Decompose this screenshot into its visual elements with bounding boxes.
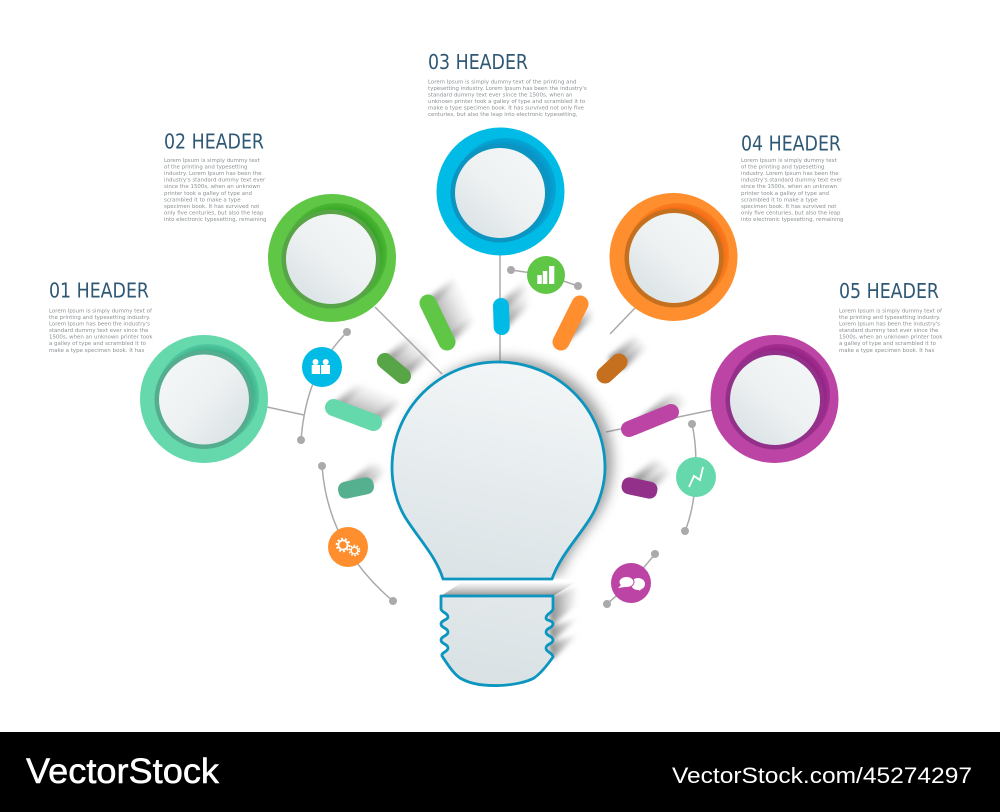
pill: dark orange — [605, 337, 647, 375]
panel: 04 header text: industry. Lorem Ipsum has been the — [741, 171, 839, 177]
panel: 03 header text: Lorem Ipsum is simply dummy text of the printing and — [428, 80, 576, 86]
pill: green — [428, 279, 475, 342]
image url: VectorStock.com/45274297 — [672, 763, 972, 788]
icon: bar chart — [507, 256, 582, 294]
pill: orange — [561, 280, 608, 342]
panel: 02 header text: of the printing and typesetting — [164, 165, 248, 171]
panel: 01 header text: make a type specimen book. It has — [49, 348, 144, 354]
panel: 05 header text: 1500s, when an unknown printer took — [839, 335, 943, 341]
panel: 05 header text: the printing and typesetting industry. — [839, 315, 941, 321]
panel: 04 header text: 04 HEADER — [741, 132, 841, 156]
panel: 03 header text: 03 HEADER — [428, 50, 528, 74]
panel: 02 header text: industry. Lorem Ipsum has been the — [164, 171, 262, 177]
panel: 01 header text: the printing and typesetting industry. — [49, 315, 151, 321]
circle 02 — [268, 194, 396, 322]
panel: 04 header text: since the 1500s, when an unknown — [741, 184, 837, 190]
panel: 02 header text: industry's standard dummy text ever — [164, 178, 266, 184]
panel: 01 header text: Lorem Ipsum has been the industry's — [49, 322, 150, 328]
circle 03 — [436, 128, 564, 256]
pill: dark green — [385, 337, 431, 376]
panel: 03 header text: make a type specimen book. It has survived not only five — [428, 106, 585, 112]
circle 05 — [710, 335, 838, 463]
panel: 02 header text: into electronic typesetting, remaining — [164, 217, 266, 223]
circle 04 — [610, 193, 738, 321]
icon: gears — [318, 462, 397, 605]
panel: 05 header text: Lorem Ipsum is simply dummy text of — [839, 308, 943, 314]
panel: 01 header text: standard dummy text ever since the — [49, 328, 149, 334]
panel: 02 header text: since the 1500s, when an unknown — [164, 184, 260, 190]
connector lines — [267, 255, 712, 432]
panel: 04 header text: scrambled it to make a type — [741, 197, 818, 203]
pill: purple — [620, 462, 675, 500]
panel: 01 header text: 1500s, when an unknown printer took — [49, 335, 153, 341]
panel: 04 header text: of the printing and typesetting — [741, 165, 824, 171]
panel: 01 header text — [49, 278, 153, 354]
pill: dark mint — [337, 463, 392, 500]
panel: 05 header text: 05 HEADER — [839, 279, 939, 303]
panel: 04 header text: industry's standard dummy text ever — [741, 178, 843, 184]
icon: people — [297, 328, 351, 444]
panel: 02 header text — [164, 130, 266, 223]
panel: 05 header text: Lorem Ipsum has been the industry's — [839, 322, 940, 328]
panel: 03 header text: centuries, but also the leap into electronic typesetting, — [428, 112, 578, 118]
circle 01 — [140, 335, 268, 463]
panel: 04 header text: printer took a galley of type and — [741, 191, 829, 197]
pill: cyan — [501, 282, 530, 327]
panel: 05 header text: standard dummy text ever since the — [839, 328, 939, 334]
panel: 04 header text — [741, 132, 844, 223]
panel: 02 header text: only five centuries, but also the leap — [164, 210, 264, 216]
panel: 04 header text: into electronic typesetting, remaining — [741, 217, 844, 223]
panel: 02 header text: specimen book. It has survived not — [164, 204, 259, 210]
panel: 02 header text: scrambled it to make a type — [164, 197, 241, 203]
panel: 04 header text: Lorem Ipsum is simply dummy text — [741, 158, 837, 164]
brand name: VectorStock — [26, 752, 220, 791]
panel: 02 header text: 02 HEADER — [164, 130, 264, 154]
panel: 01 header text: Lorem Ipsum is simply dummy text of — [49, 308, 153, 314]
panel: 01 header text: a galley of type and scrambled it to — [49, 341, 147, 347]
panel: 02 header text: printer took a galley of type and — [164, 191, 252, 197]
panel: 03 header text: unknown printer took a galley of type and scrambled it to — [428, 99, 586, 105]
panel: 03 header text: typesetting industry. Lorem Ipsum has been the industry's — [428, 86, 587, 92]
panel: 01 header text: 01 HEADER — [49, 278, 149, 302]
panel: 05 header text: make a type specimen book. It has — [839, 348, 934, 354]
footer band — [0, 732, 1000, 812]
panel: 02 header text: Lorem Ipsum is simply dummy text — [164, 158, 260, 164]
panel: 05 header text — [839, 279, 943, 354]
icon: line chart — [676, 420, 716, 535]
pill: mint — [334, 384, 402, 422]
bulb — [392, 358, 613, 579]
bulb base — [441, 582, 580, 686]
panel: 05 header text: a galley of type and scrambled it to — [839, 341, 937, 347]
panel: 03 header text: standard dummy text ever since the 1500s, when an — [428, 93, 572, 99]
panel: 04 header text: only five centuries, but also the leap — [741, 210, 841, 216]
pill: magenta — [629, 388, 699, 429]
icon: speech bubbles — [603, 550, 659, 608]
panel: 03 header text — [428, 50, 587, 118]
panel: 04 header text: specimen book. It has survived not — [741, 204, 836, 210]
